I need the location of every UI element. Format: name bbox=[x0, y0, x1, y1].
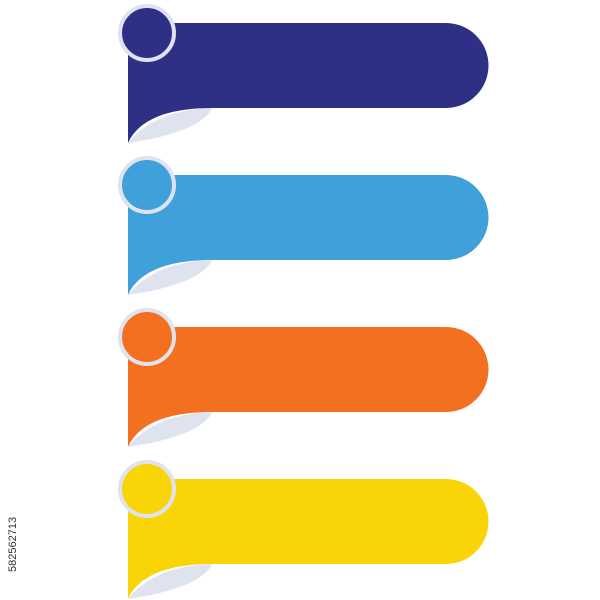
circle marker bbox=[120, 6, 174, 60]
banner 4: yellow bbox=[120, 462, 488, 599]
shadow curl bbox=[128, 412, 212, 447]
circle marker bbox=[120, 462, 174, 516]
band bbox=[128, 23, 488, 143]
circle marker bbox=[120, 310, 174, 364]
shadow curl bbox=[128, 260, 212, 295]
shadow curl bbox=[128, 108, 212, 143]
band bbox=[128, 175, 488, 295]
band bbox=[128, 479, 488, 599]
banner 1: navy bbox=[120, 6, 488, 143]
banner 3: orange bbox=[120, 310, 488, 447]
shadow curl bbox=[128, 564, 212, 599]
watermark id: 582562713 bbox=[7, 517, 19, 572]
circle marker bbox=[120, 158, 174, 212]
banner 2: light blue bbox=[120, 158, 488, 295]
band bbox=[128, 327, 488, 447]
